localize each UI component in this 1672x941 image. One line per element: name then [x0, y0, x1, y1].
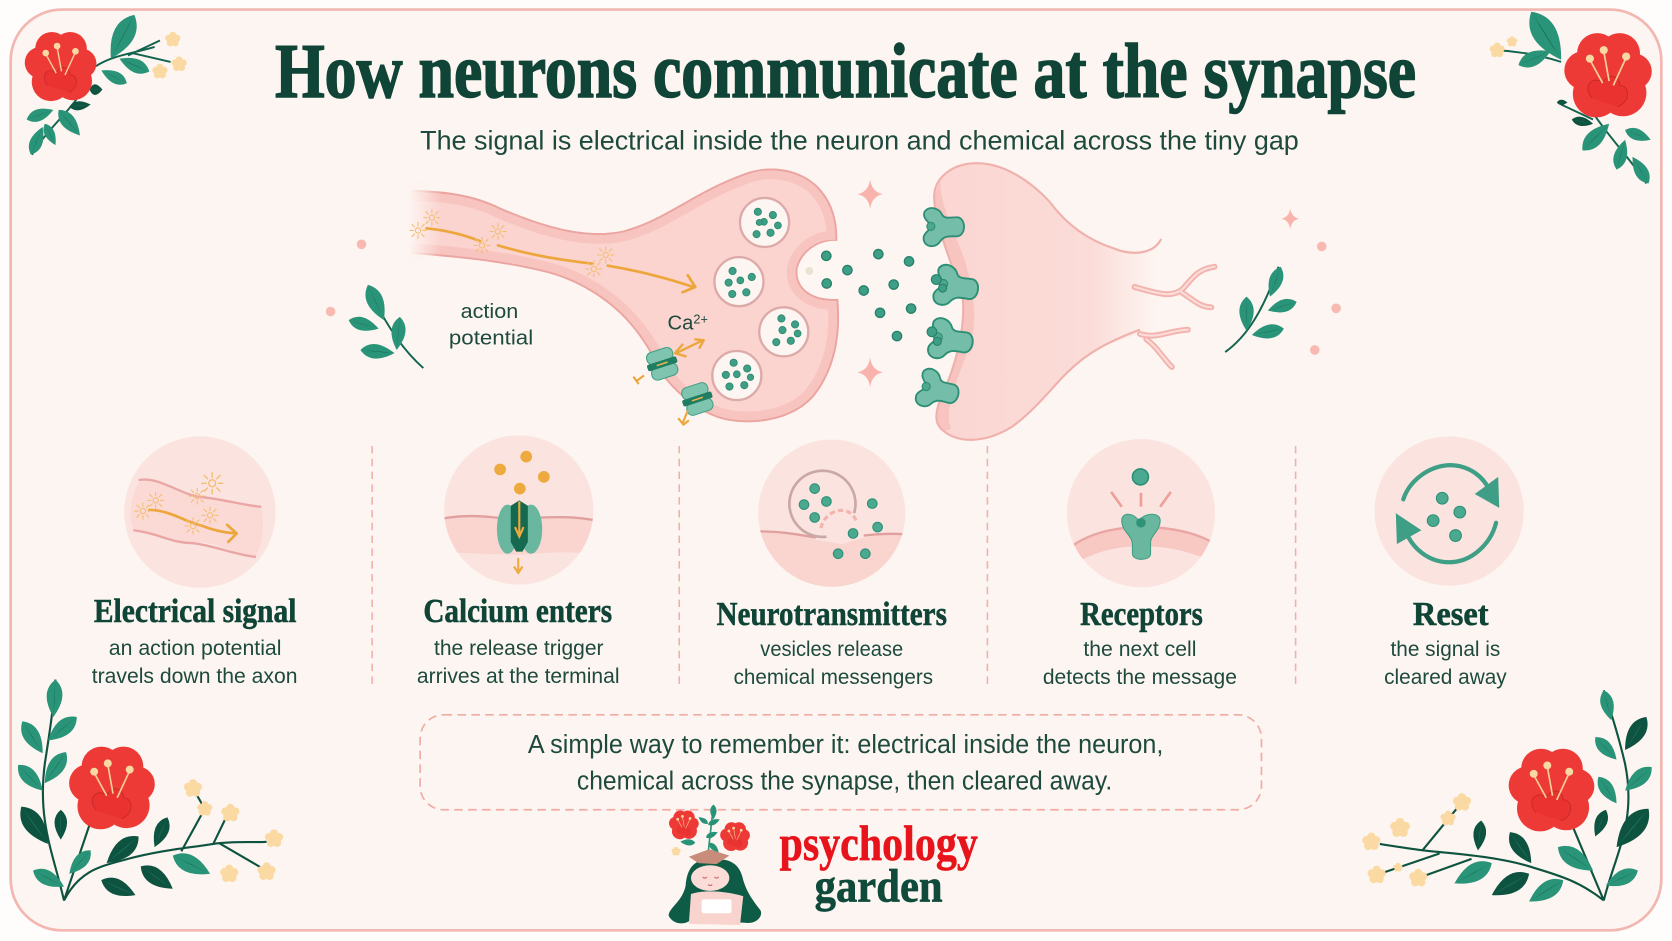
logo: psychology garden: psychology: [779, 815, 978, 871]
vesicles: [712, 198, 808, 400]
step 4 text: receptors: the next cell: [1083, 637, 1196, 661]
logo: psychology garden: garden: [815, 861, 943, 913]
cleft pocket: [797, 241, 839, 299]
neurotransmitters in the gap: [822, 249, 916, 341]
dendrites: [1135, 267, 1215, 367]
step 4 icon: receptor: [1067, 439, 1216, 587]
label: action potential: potential: [449, 328, 533, 350]
step 1 text: electrical signal: Electrical signal: [94, 593, 296, 630]
step 3 text: neurotransmitters: Neurotransmitters: [717, 596, 947, 633]
callout: A simple way to remember it: electrical inside the neuron,: [528, 731, 1163, 759]
step 2 text: calcium enters: the release trigger: [434, 636, 604, 660]
decorative dots and stars: [326, 179, 1341, 387]
step 2 icon: calcium channel: [443, 435, 597, 585]
step 1 text: electrical signal: travels down the axon: [92, 664, 298, 688]
step 5 icon: reset cycle: [1374, 436, 1524, 586]
label: action potential: [449, 301, 533, 350]
step 5 text: reset: [1384, 596, 1507, 689]
corner flowers: top left: [25, 10, 187, 157]
corner flowers: bottom right: [1362, 689, 1657, 909]
step 5 text: reset: Reset: [1413, 596, 1489, 633]
step 1 text: electrical signal: [92, 593, 298, 688]
step 5 text: reset: the signal is: [1390, 637, 1500, 661]
step 5 text: reset: cleared away: [1384, 665, 1507, 689]
step 1 icon: electrical signal: [124, 436, 276, 588]
step 3 text: neurotransmitters: chemical messengers: [734, 665, 933, 689]
step 3 icon: vesicle release: [758, 440, 906, 587]
step 4 text: receptors: detects the message: [1043, 665, 1237, 689]
step 1 text: electrical signal: an action potential: [109, 636, 282, 660]
calcium channels: [633, 339, 716, 425]
label: action potential: action: [461, 301, 518, 323]
label: calcium: Ca: [668, 313, 693, 335]
step 4 text: receptors: Receptors: [1080, 596, 1203, 633]
subtitle: The signal is electrical inside the neuron and chemical across the tiny gap: [420, 125, 1299, 155]
callout: chemical across the synapse, then cleared away.: [577, 767, 1112, 796]
corner flowers: bottom left: [13, 679, 283, 902]
receptors: [914, 208, 981, 414]
step 4 text: receptors: [1043, 596, 1237, 689]
postsynaptic neuron: [914, 163, 1215, 440]
decorative sprig left: [347, 281, 423, 368]
step 2 text: calcium enters: Calcium enters: [423, 593, 612, 630]
callout: [420, 715, 1261, 810]
axon signal arrow: [409, 209, 695, 292]
logo: psychology garden: [669, 804, 978, 925]
title: How neurons communicate at the synapse: [275, 29, 1416, 114]
step 2 text: calcium enters: arrives at the terminal: [417, 664, 620, 688]
step 3 text: neurotransmitters: [717, 596, 947, 689]
dividers: [372, 446, 1296, 686]
step 2 text: calcium enters: [417, 593, 620, 688]
corner flowers: top right: [1490, 5, 1654, 187]
label: calcium: 2+: [693, 311, 708, 326]
decorative sprig right: [1225, 264, 1298, 352]
logo illustration: [669, 804, 761, 925]
presynaptic neuron: [409, 168, 840, 426]
step 3 text: neurotransmitters: vesicles release: [760, 637, 903, 661]
